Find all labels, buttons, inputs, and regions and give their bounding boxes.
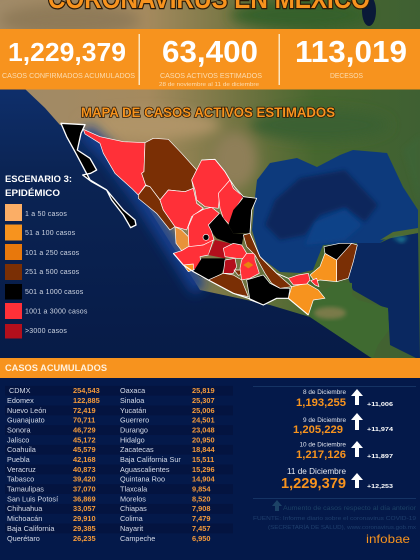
table of accumulated cases: 26,235 — [73, 534, 96, 543]
table of accumulated cases: 29,910 — [73, 514, 96, 523]
table of accumulated cases: 15,296 — [192, 465, 215, 474]
table of accumulated cases: Querétaro — [7, 534, 40, 543]
legend: 1001 a 3000 casos — [25, 308, 88, 316]
stat: active cases: 28 de noviembre al 11 de diciembre — [159, 82, 259, 88]
stat: active cases — [159, 34, 262, 88]
lake michigan — [362, 0, 376, 26]
table of accumulated cases: 25,307 — [192, 396, 215, 405]
table of accumulated cases: 37,070 — [73, 485, 96, 494]
table of accumulated cases: 45,172 — [73, 435, 96, 444]
stat: deaths: 113,019 — [295, 34, 407, 69]
table of accumulated cases: 40,873 — [73, 465, 96, 474]
table of accumulated cases: Colima — [120, 514, 144, 523]
caribbean sea — [348, 233, 420, 360]
table of accumulated cases: 6,950 — [192, 534, 210, 543]
gulf of mexico — [252, 150, 418, 273]
day: 9 de diciembre: +11,974 — [367, 427, 394, 433]
table of accumulated cases: Veracruz — [7, 465, 36, 474]
section header: casos acumulados — [0, 358, 420, 378]
table of accumulated cases: 42,168 — [73, 455, 96, 464]
day: 9 de diciembre: 1,205,229 — [293, 424, 343, 436]
day: 10 de diciembre: +11,897 — [367, 454, 393, 460]
stat: deaths: DECESOS — [330, 71, 363, 80]
table of accumulated cases: Zacatecas — [120, 445, 154, 454]
table of accumulated cases: Hidalgo — [120, 435, 145, 444]
table of accumulated cases: CDMX — [9, 386, 31, 395]
day: 11 de diciembre: 11 de Diciembre — [287, 467, 346, 476]
legend: 101 a 250 casos — [25, 250, 80, 257]
table of accumulated cases: Oaxaca — [120, 386, 146, 395]
legend: 1 a 50 casos — [25, 211, 67, 218]
florida — [403, 135, 420, 205]
central and southern states — [173, 159, 357, 315]
north-west states — [61, 123, 203, 230]
table of accumulated cases: 25,819 — [192, 386, 215, 395]
table of accumulated cases: 70,711 — [73, 416, 95, 425]
table of accumulated cases: Morelos — [120, 494, 146, 503]
legend: 51 a 100 casos — [25, 230, 76, 237]
day: 9 de diciembre — [293, 413, 394, 436]
table of accumulated cases: 7,457 — [192, 524, 210, 533]
table of accumulated cases: 46,729 — [73, 426, 96, 434]
cuba — [380, 228, 418, 240]
table of accumulated cases: San Luis Potosí — [7, 494, 58, 503]
table of accumulated cases: Tamaulipas — [7, 485, 44, 494]
table of accumulated cases — [5, 386, 233, 543]
table of accumulated cases: 36,869 — [73, 494, 96, 503]
table of accumulated cases: Michoacán — [7, 514, 42, 523]
central america — [310, 282, 389, 358]
table of accumulated cases: Chihuahua — [7, 504, 43, 513]
table of accumulated cases: Quintana Roo — [120, 475, 165, 484]
table of accumulated cases: Tlaxcala — [120, 485, 148, 494]
table of accumulated cases: Guerrero — [120, 416, 149, 425]
stat: active cases: 63,400 — [162, 34, 258, 69]
table of accumulated cases: Baja California Sur — [120, 455, 181, 464]
stat: active cases: CASOS ACTIVOS ESTIMADOS — [160, 71, 262, 80]
legend — [5, 174, 88, 338]
table of accumulated cases: Nuevo León — [7, 406, 46, 415]
legend heading: ESCENARIO 3: — [5, 174, 72, 185]
stats banner — [0, 29, 420, 90]
map heading: MAPA DE CASOS ACTIVOS ESTIMADOS — [81, 104, 335, 120]
infobae logo: infobae — [366, 532, 410, 546]
table of accumulated cases: Baja California — [7, 524, 55, 533]
legend: 501 a 1000 casos — [25, 289, 84, 296]
day: 11 de diciembre: +12,253 — [367, 484, 393, 490]
table of accumulated cases: Edomex — [7, 396, 34, 405]
note: increase arrow: Aumento de casos respecto al día anterior — [283, 506, 416, 512]
table of accumulated cases: 8,520 — [192, 494, 210, 503]
table of accumulated cases: Campeche — [120, 534, 155, 543]
table of accumulated cases: Jalisco — [7, 435, 29, 444]
table of accumulated cases: Chiapas — [120, 504, 147, 513]
table of accumulated cases: 254,543 — [73, 386, 100, 395]
stat: confirmed cases: CASOS CONFIRMADOS ACUMULADOS — [2, 71, 135, 80]
satellite background — [0, 0, 420, 360]
table of accumulated cases: 14,904 — [192, 475, 215, 484]
table of accumulated cases: 20,950 — [192, 435, 215, 444]
table of accumulated cases: Durango — [120, 426, 148, 434]
legend heading: EPIDÉMICO — [5, 187, 61, 199]
stat: confirmed cases — [2, 37, 135, 80]
table of accumulated cases: 45,579 — [73, 445, 96, 454]
day: 10 de diciembre: 1,217,126 — [296, 449, 346, 461]
section header: casos acumulados: CASOS ACUMULADOS — [5, 363, 108, 374]
table of accumulated cases: Puebla — [7, 455, 31, 464]
map of Mexico — [61, 123, 357, 315]
day: 8 de diciembre — [296, 389, 393, 409]
table of accumulated cases: 7,908 — [192, 504, 210, 513]
table of accumulated cases: 18,844 — [192, 445, 215, 454]
table of accumulated cases: 122,885 — [73, 396, 100, 405]
day: 8 de diciembre: +11,006 — [367, 402, 393, 408]
day: 8 de diciembre: 8 de Diciembre — [303, 389, 346, 396]
legend: >3000 casos — [25, 328, 67, 335]
day: 10 de diciembre — [296, 441, 393, 461]
table of accumulated cases: 24,501 — [192, 416, 215, 425]
note: increase arrow — [272, 500, 416, 512]
day: 9 de diciembre: 9 de Diciembre — [303, 417, 346, 424]
table of accumulated cases: Aguascalientes — [120, 465, 170, 474]
table of accumulated cases: Sonora — [7, 426, 31, 434]
bottom panel background — [0, 360, 420, 560]
daily totals panel — [253, 386, 416, 499]
day: 11 de diciembre — [281, 467, 393, 492]
table of accumulated cases: 39,420 — [73, 475, 96, 484]
legend: 251 a 500 casos — [25, 269, 80, 276]
table of accumulated cases: Coahuila — [7, 445, 37, 454]
table of accumulated cases: Nayarit — [120, 524, 143, 533]
table of accumulated cases: Sinaloa — [120, 396, 145, 405]
pacific ocean — [0, 70, 375, 360]
source: FUENTE: Informe diario sobre el coronavirus COVID-19 — [253, 516, 416, 522]
table of accumulated cases: 33,057 — [73, 504, 96, 513]
table of accumulated cases: 7,479 — [192, 514, 210, 523]
table of accumulated cases: 25,006 — [192, 406, 215, 415]
table of accumulated cases: Tabasco — [7, 475, 34, 484]
table of accumulated cases: 15,511 — [192, 455, 214, 464]
day: 8 de diciembre: 1,193,255 — [296, 397, 347, 409]
table of accumulated cases: 29,385 — [73, 524, 96, 533]
source: (SECRETARÍA DE SALUD), www.coronavirus.gob.mx — [268, 524, 416, 531]
day: 11 de diciembre: 1,229,379 — [281, 475, 346, 492]
table of accumulated cases: 23,048 — [192, 426, 215, 434]
table of accumulated cases: 9,854 — [192, 485, 211, 494]
stat: confirmed cases: 1,229,379 — [8, 37, 126, 67]
day: 10 de diciembre: 10 de Diciembre — [299, 442, 346, 448]
table of accumulated cases: Yucatán — [120, 406, 146, 415]
table of accumulated cases: 72,419 — [73, 406, 96, 415]
table of accumulated cases: Guanajuato — [7, 416, 45, 425]
